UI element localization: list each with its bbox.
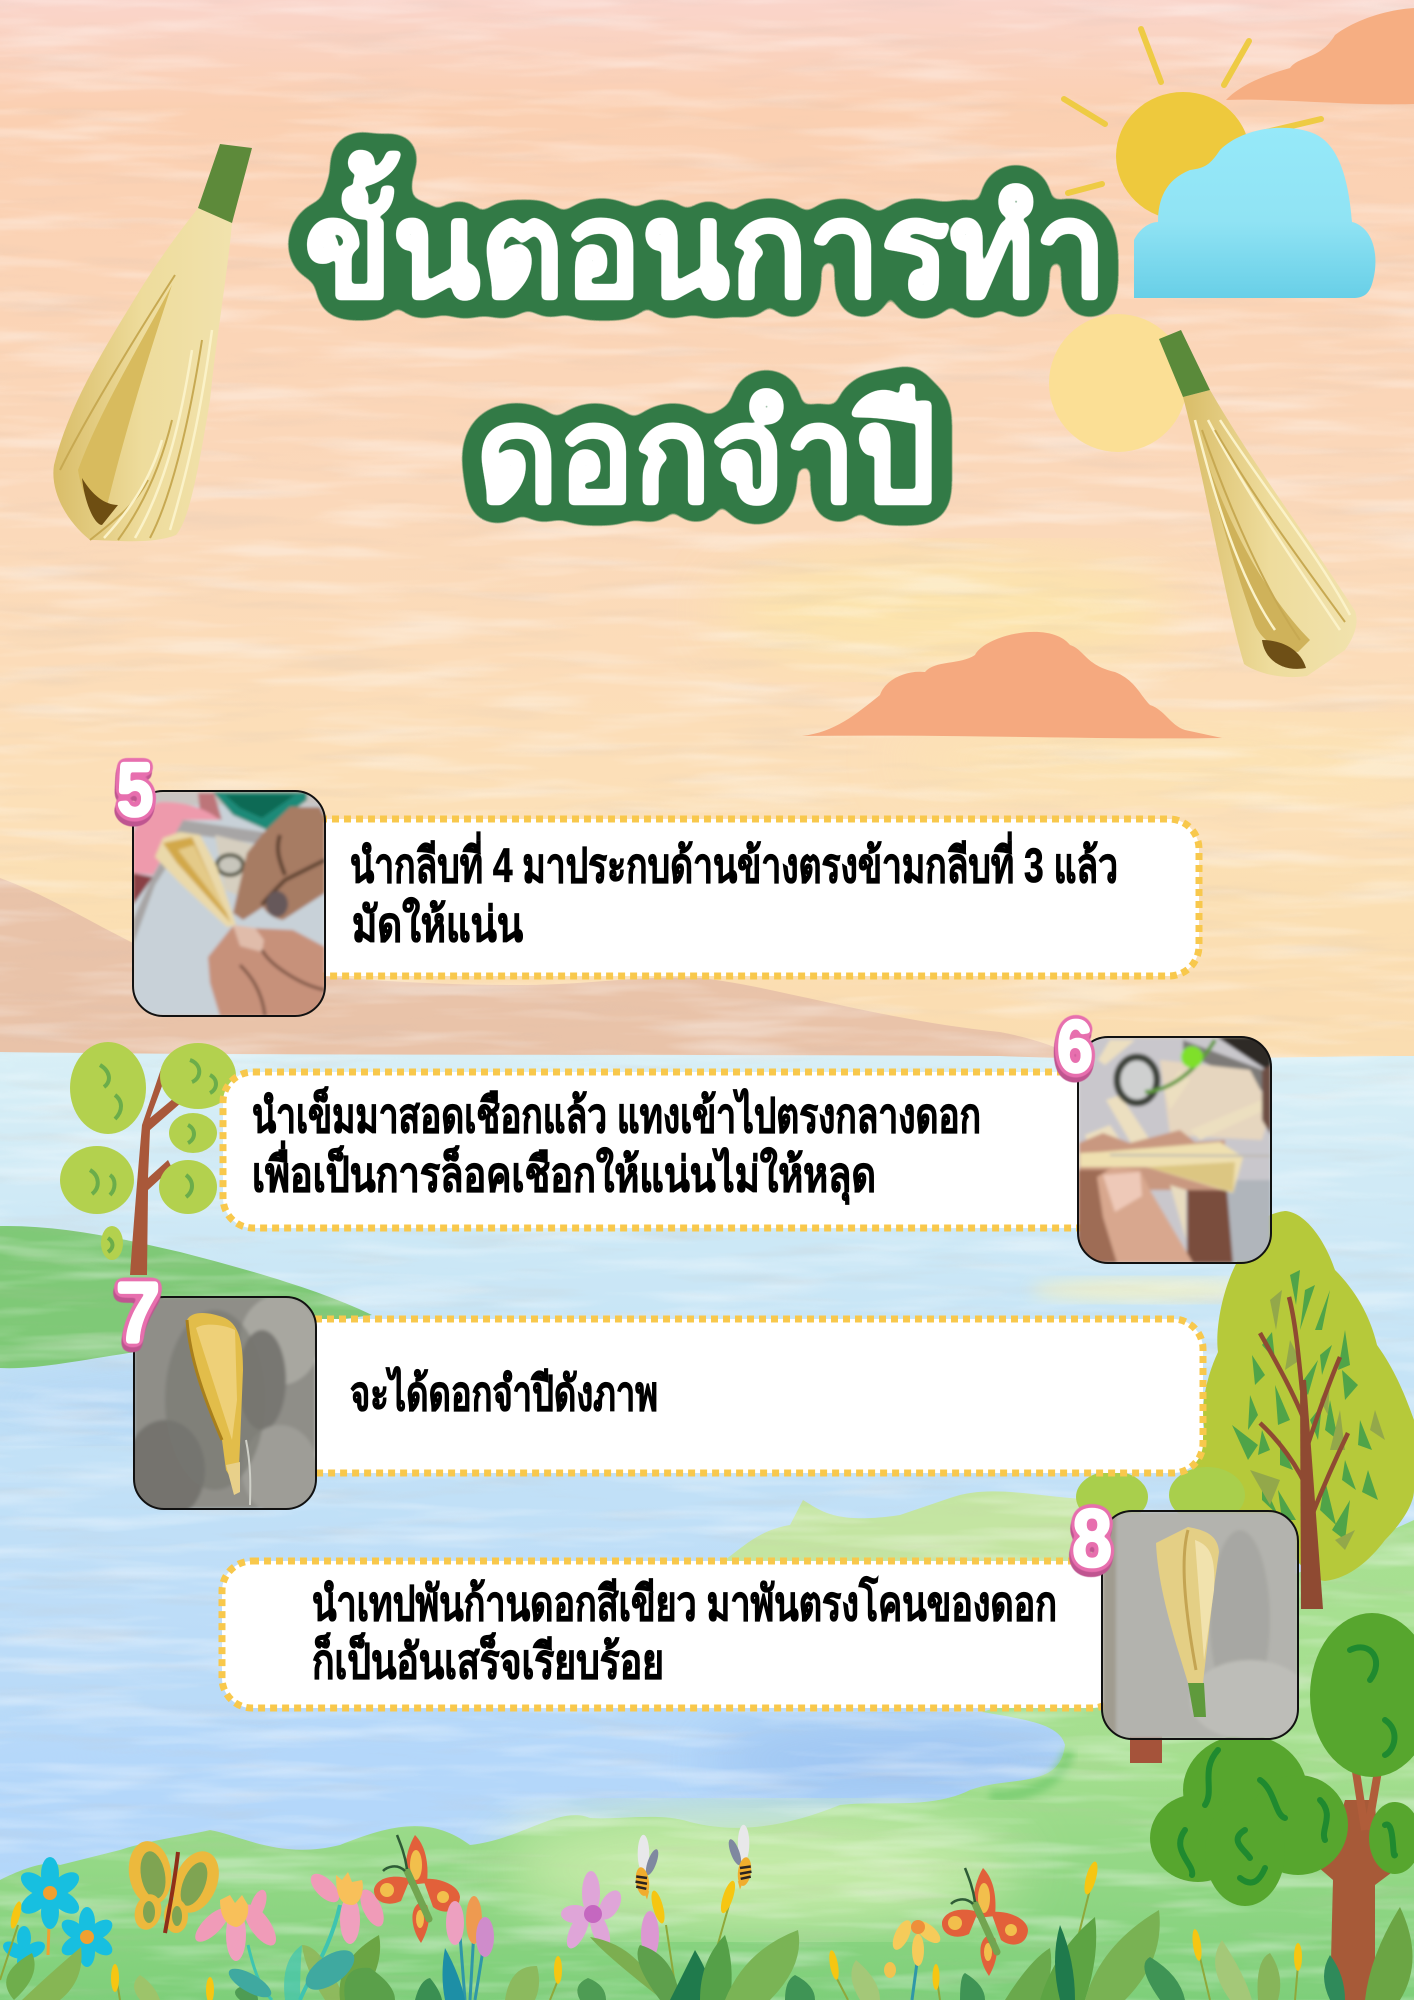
card [285, 1319, 1203, 1473]
leaves: foreground [6, 1907, 1412, 2000]
flower: tulips [446, 1896, 494, 2000]
flower: yellow [889, 1917, 944, 2000]
panel: step 5 [116, 748, 1199, 1016]
icon: orange cloud middle [802, 632, 1222, 738]
butterfly: yellow [125, 1838, 227, 1933]
step number: 6 [1057, 1005, 1093, 1088]
icon: blue cloud [1134, 128, 1375, 298]
butterfly: orange right [942, 1868, 1028, 1976]
step text: ก็เป็นอันเสร็จเรียบร้อย [312, 1632, 664, 1689]
card [223, 1072, 1113, 1228]
step number: 5 [116, 748, 154, 833]
panel: step 6 [223, 1005, 1271, 1263]
step text: จะได้ดอกจำปีดังภาพ [350, 1365, 658, 1421]
step text [312, 1575, 1057, 1689]
meadow flowers and plants [0, 1825, 1412, 2000]
title [304, 150, 1107, 531]
step number: 8 [1072, 1493, 1112, 1584]
step number: 7 [115, 1264, 161, 1360]
butterfly: orange left [374, 1835, 460, 1943]
title: ขั้นตอนการทำ [304, 150, 1107, 326]
step text [252, 1086, 981, 1205]
panel: step 7 [115, 1264, 1203, 1520]
flowers: blue [0, 1857, 116, 1974]
step text: เพื่อเป็นการล็อคเชือกให้แน่นไม่ให้หลุด [252, 1140, 876, 1205]
small trees behind step 8 [1076, 1467, 1245, 1763]
background: foreground meadow [0, 1520, 1414, 2000]
flower: pink left [190, 1888, 282, 2000]
step text: นำเทปพันก้านดอกสีเขียว มาพันตรงโคนของดอก [312, 1575, 1057, 1631]
card [222, 1561, 1122, 1708]
background: lake water [0, 1052, 1414, 1900]
icon: bees [634, 1825, 753, 1900]
photo [1102, 1511, 1310, 1740]
background: distant island [725, 1491, 1120, 1570]
card [290, 819, 1199, 976]
spikes: yellow buds [0, 1860, 1302, 2000]
photo [1078, 1037, 1271, 1263]
photo [135, 1298, 315, 1508]
icon: sun [1064, 29, 1321, 220]
tree: right tall [1194, 1211, 1414, 1609]
title: ดอกจำปี [476, 379, 936, 531]
background: peach painted sky [0, 0, 1414, 1080]
photo [133, 791, 325, 1016]
icon: champa flower left [53, 144, 252, 541]
step text: นำเข็มมาสอดเชือกแล้ว แทงเข้าไปตรงกลางดอก [252, 1086, 981, 1143]
icon: champa flower right [1159, 330, 1357, 677]
step text [350, 831, 1118, 952]
background: left green bank [0, 1226, 372, 1368]
icon: orange cloud top right [1226, 8, 1414, 104]
step text: นำกลีบที่ 4 มาประกบด้านข้างตรงข้ามกลีบที่ 3 แล้ว [350, 831, 1118, 893]
icon: pale sun [1049, 314, 1187, 452]
background: distant hills [0, 878, 1095, 1070]
step text: มัดให้แน่น [352, 896, 523, 952]
panel: step 8 [222, 1493, 1310, 1740]
tree: upper left [60, 1042, 236, 1275]
flower: pink right [300, 1869, 389, 2000]
flower: purple [561, 1871, 659, 1959]
tree: lower right [1150, 1613, 1414, 2000]
